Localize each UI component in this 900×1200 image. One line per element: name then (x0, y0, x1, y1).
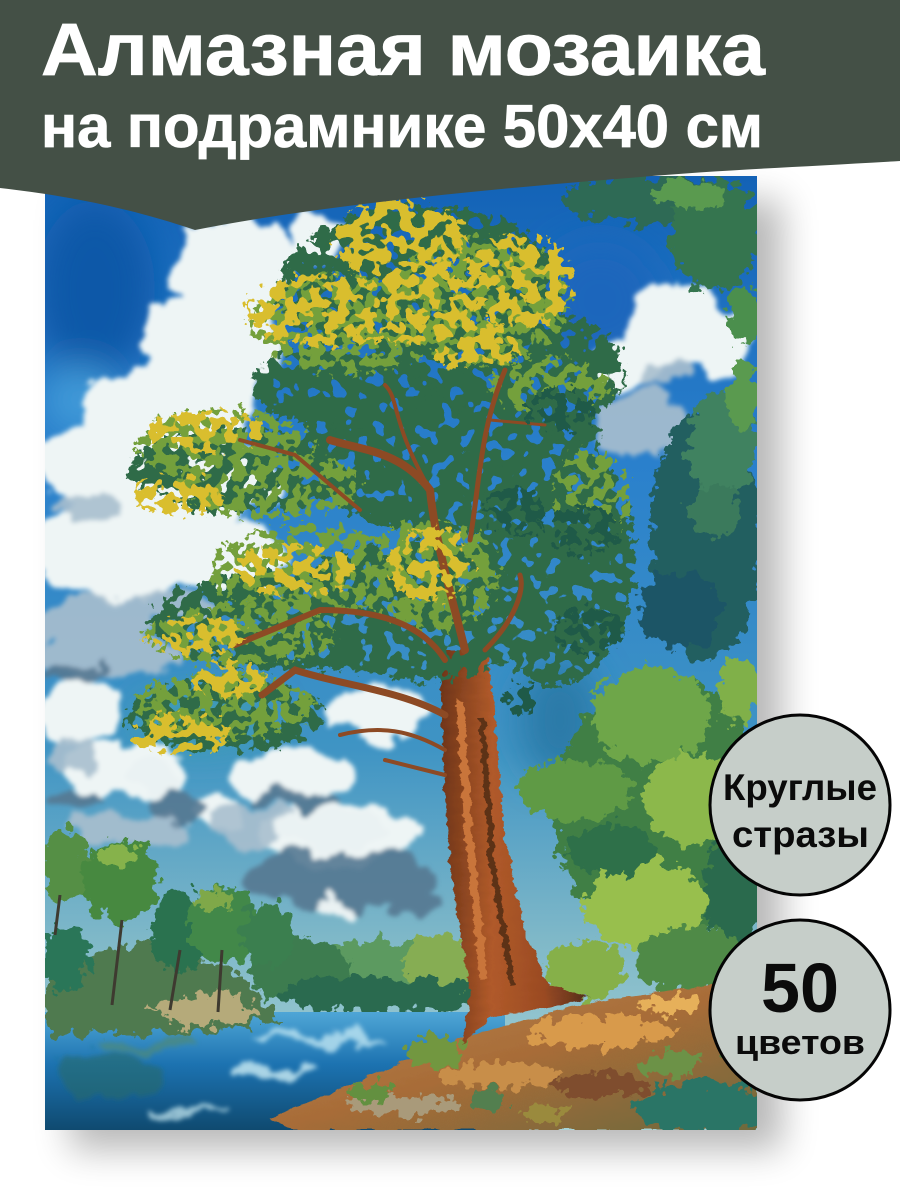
grass (346, 1029, 757, 1130)
title: Алмазная мозаика (41, 8, 766, 91)
title (41, 8, 766, 160)
lower right trees (517, 656, 765, 1000)
crown: dark accents (485, 388, 625, 715)
clouds (35, 215, 751, 917)
sky (45, 176, 757, 1130)
badge: round rhinestones: стразы (732, 814, 869, 855)
title: на подрамнике 50х40 см (41, 93, 763, 160)
right dark foliage (638, 359, 760, 660)
badge: round rhinestones: Круглые (723, 767, 877, 808)
ground bank (270, 985, 757, 1130)
ground light patches (345, 997, 700, 1115)
river (45, 1012, 505, 1130)
left bank trees (41, 829, 294, 1035)
crown: mid-green foliage dabs (135, 235, 630, 737)
badge: 50 colours: цветов (735, 1024, 865, 1062)
water reflections (55, 1033, 385, 1116)
painting: tree by the river (35, 176, 775, 1134)
left tree stems (55, 895, 222, 1012)
crown: yellow sunlit foliage (130, 198, 575, 755)
tree trunk (440, 650, 590, 1045)
upper right foliage (560, 176, 763, 343)
badge: 50 colours (710, 920, 890, 1100)
badge: round rhinestones (710, 715, 890, 895)
crown base: dark foliage behind branches (125, 205, 635, 751)
far treeline (250, 933, 490, 1013)
header banner (0, 0, 900, 230)
crown branches (235, 370, 545, 775)
sky tonal patches (35, 200, 660, 780)
painting shadow (70, 200, 782, 1150)
badge: 50 colours: 50 (761, 949, 839, 1027)
